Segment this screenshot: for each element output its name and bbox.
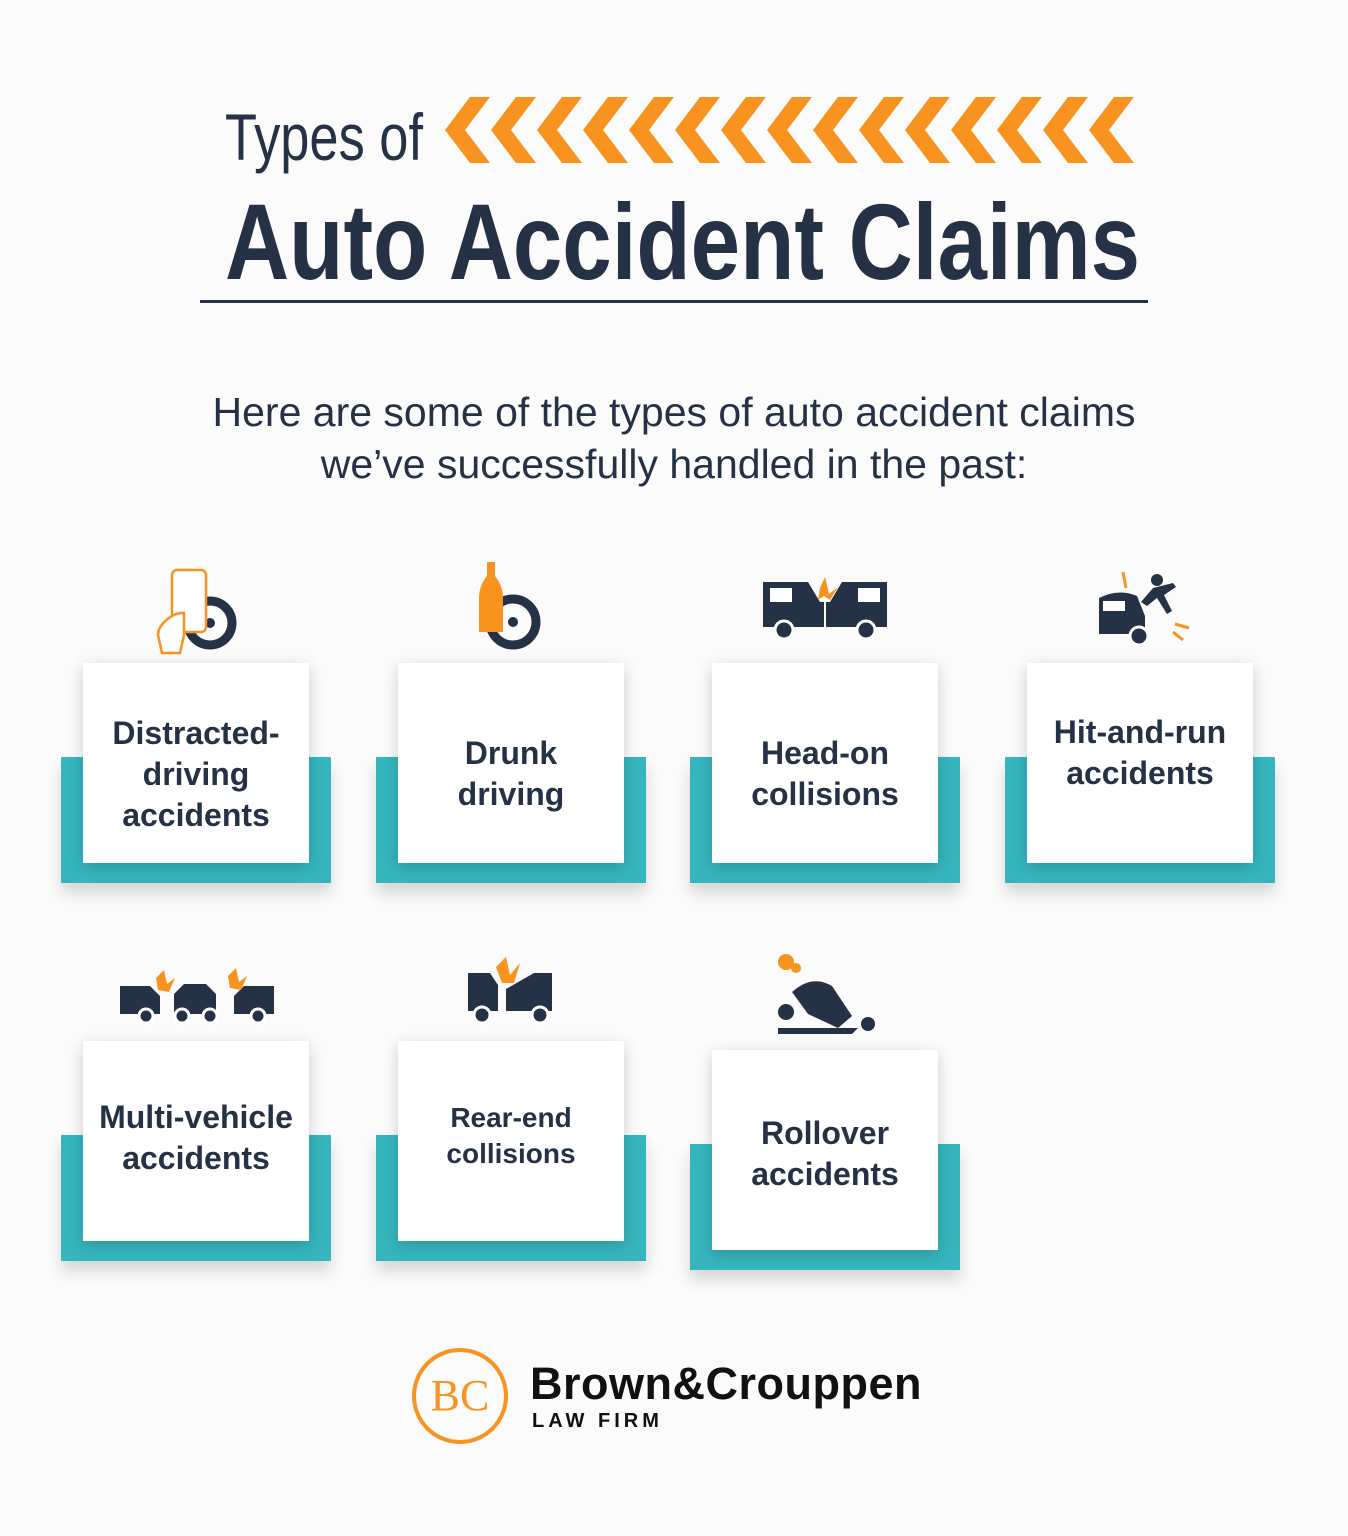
card: rollover — [684, 1048, 966, 1286]
subtitle text: Types of: Types of — [225, 100, 424, 174]
card: rollover: Rollover — [761, 1115, 889, 1151]
card: multi-vehicle: accidents — [122, 1140, 270, 1176]
intro text: Here are some of the types of auto accident claims — [213, 389, 1135, 435]
card: multi-vehicle — [56, 1038, 336, 1276]
card: hit and run: accidents — [1066, 755, 1214, 791]
icon: rollover — [778, 954, 875, 1034]
chevrons — [445, 97, 1134, 163]
icon: phone and wheel — [156, 568, 236, 654]
card: distracted driving: driving — [143, 756, 249, 792]
intro text — [213, 389, 1135, 487]
card: rear-end — [370, 1038, 652, 1276]
card: drunk driving: Drunk — [465, 735, 557, 771]
card: hit and run: Hit-and-run — [1054, 714, 1226, 750]
title — [200, 97, 1148, 303]
card: drunk driving — [370, 660, 652, 898]
card: rollover: accidents — [751, 1156, 899, 1192]
card: distracted driving — [56, 660, 336, 898]
card: rear-end: Rear-end — [450, 1102, 572, 1133]
card: multi-vehicle: Multi-vehicle — [99, 1099, 293, 1135]
icon: bottle and wheel — [479, 562, 540, 650]
card: distracted driving: accidents — [122, 796, 270, 832]
icon: head-on — [763, 577, 887, 638]
intro text: we’ve successfully handled in the past: — [321, 441, 1027, 487]
logo — [412, 1348, 922, 1444]
card: head-on: Head-on — [761, 735, 889, 771]
brand name: Brown&Crouppen — [530, 1358, 922, 1409]
icon: BC circle — [412, 1348, 508, 1444]
icon: hit and run — [1099, 572, 1190, 644]
card: head-on — [684, 660, 966, 898]
card: hit and run — [1000, 660, 1280, 898]
icon: BC circle: BC — [431, 1371, 489, 1420]
icon: multi-vehicle — [120, 968, 274, 1022]
icon: rear-end — [468, 957, 552, 1022]
card: drunk driving: driving — [458, 776, 564, 812]
card: rear-end: collisions — [446, 1138, 576, 1169]
tagline: LAW FIRM — [532, 1410, 663, 1432]
card: head-on: collisions — [751, 776, 899, 812]
card: distracted driving: Distracted- — [112, 714, 280, 750]
